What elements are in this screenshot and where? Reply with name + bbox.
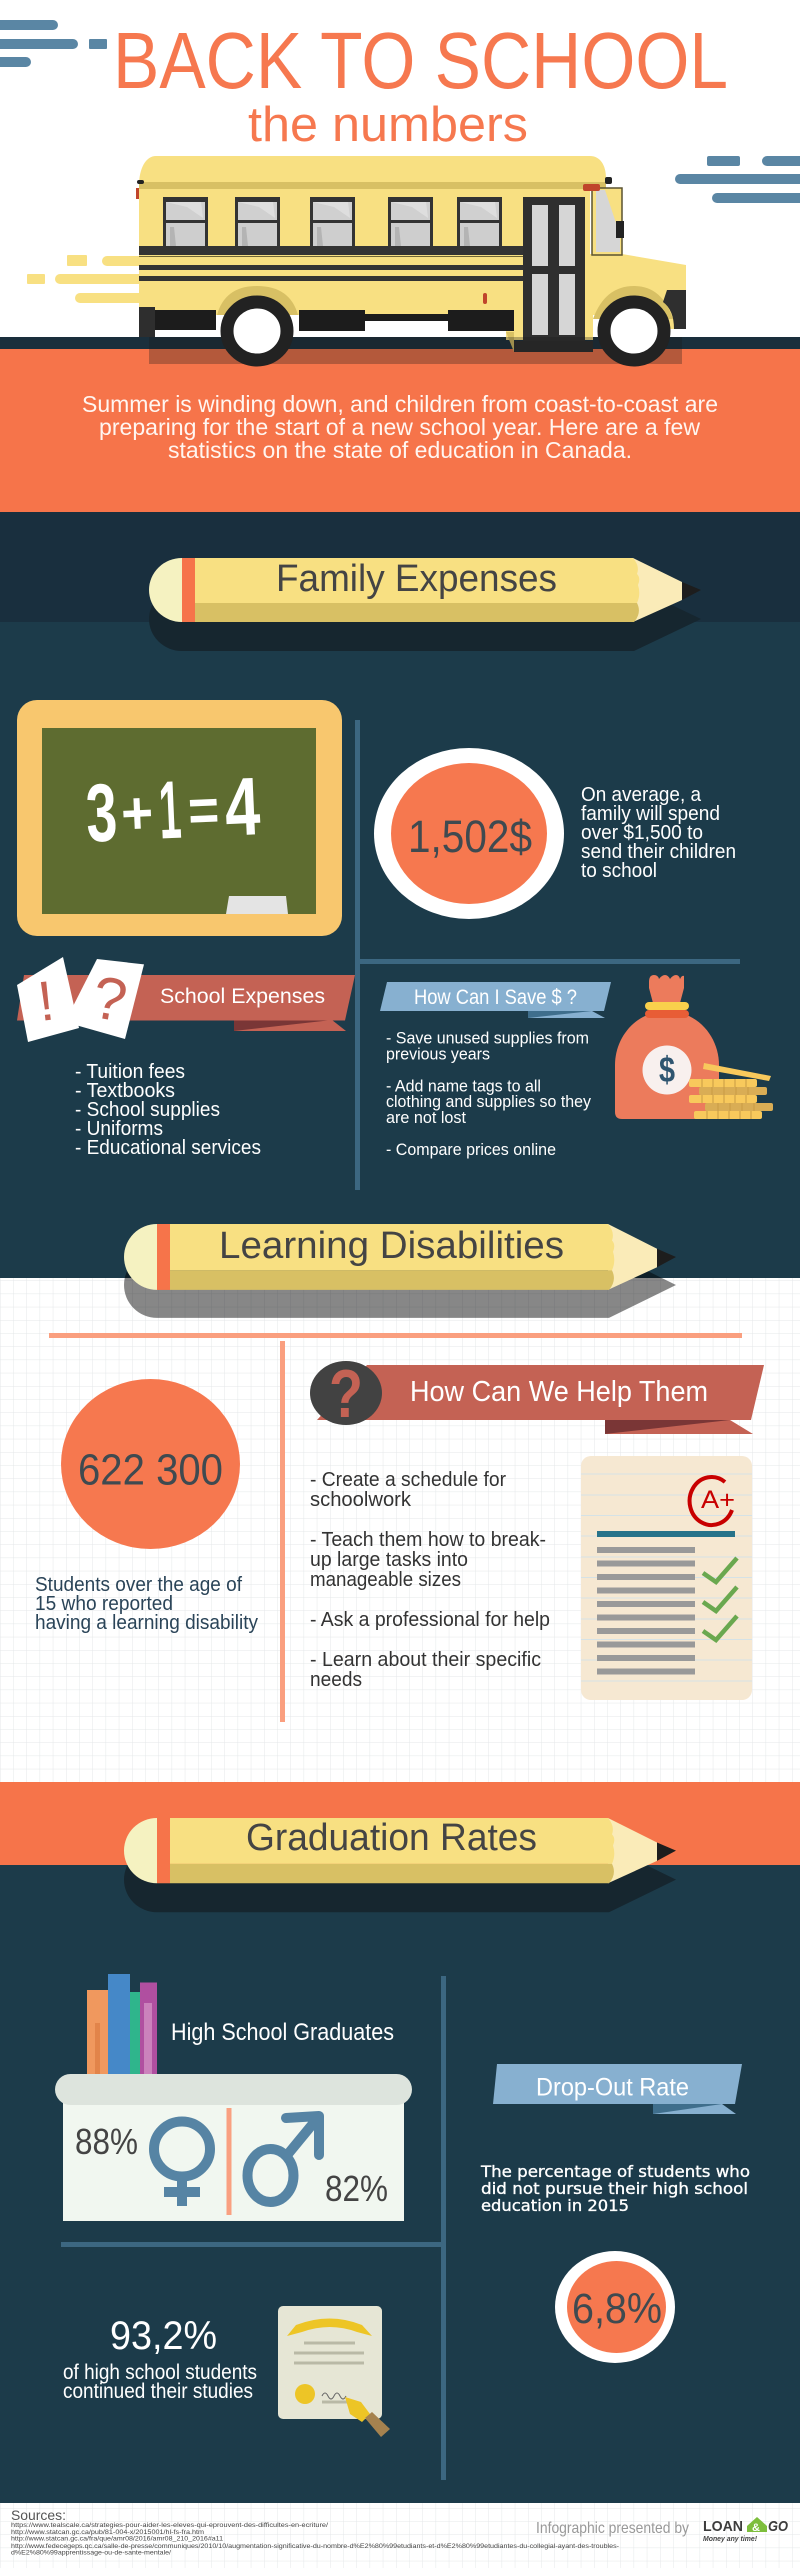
intro text: Summer is winding down, and children from coast-to-coast are xyxy=(82,391,718,417)
icon: exclamation and question cards: ? xyxy=(87,963,132,1035)
sources list xyxy=(11,2523,619,2556)
text: average family spend: send their children xyxy=(581,841,736,863)
sources list: d%E2%80%99apprentissage-ou-de-sante-mentale/ xyxy=(11,2550,171,2556)
text: average family spend: over $1,500 to xyxy=(581,822,703,844)
heading: graduation rates pencil xyxy=(124,1817,676,1883)
text: drop-out description: education in 2015 xyxy=(481,2196,629,2215)
stat circle: 622 300 xyxy=(61,1379,240,1549)
list: how to help: - Ask a professional for help xyxy=(310,1609,550,1631)
ribbon: drop-out rate: Drop-Out Rate xyxy=(536,2074,689,2102)
list: saving tips: - Add name tags to all xyxy=(386,1076,541,1096)
sources list: http://www.statcan.gc.ca/fra/que/amr08/2016/amr08_210_2016#a11 xyxy=(11,2536,224,2542)
icon: money bag and coins: $ xyxy=(659,1049,675,1090)
label: high school graduates: High School Graduates xyxy=(171,2019,394,2046)
text: drop-out description xyxy=(480,2162,750,2215)
text: average family spend: On average, a xyxy=(581,784,702,806)
sources list: http://www.statcan.gc.ca/pub/81-004-x/2015001/hl-fs-fra.htm xyxy=(11,2530,204,2536)
icon: diploma xyxy=(278,2306,390,2437)
text: drop-out description: The percentage of students who xyxy=(480,2162,750,2181)
sources heading: Sources: xyxy=(11,2508,66,2523)
intro text: statistics on the state of education in Canada. xyxy=(168,437,632,463)
chalk equation: 4 xyxy=(223,761,262,854)
text: students with disability: Students over the age of xyxy=(35,1574,242,1596)
list: saving tips: - Compare prices online xyxy=(386,1140,556,1159)
list: school expenses: - School supplies xyxy=(75,1099,220,1121)
text: average family spend: family will spend xyxy=(581,803,720,825)
icon: books xyxy=(87,1974,157,2074)
bus stripes xyxy=(139,246,524,281)
ribbon: school expenses: School Expenses xyxy=(160,984,325,1008)
stat circle: 6,8% xyxy=(555,2251,675,2363)
presented by: Infographic presented by xyxy=(536,2520,689,2537)
text: drop-out description: did not pursue their high school xyxy=(481,2179,748,2198)
orange band xyxy=(0,1782,800,1865)
icon: graded test paper: A+ xyxy=(701,1486,735,1514)
icon: exclamation and question cards: ! xyxy=(34,968,57,1033)
list: saving tips: previous years xyxy=(386,1044,490,1064)
ribbon: how can we help them xyxy=(310,1356,764,1434)
text: continued studies: continued their studies xyxy=(63,2380,253,2403)
logo: loan and go: GO xyxy=(768,2518,788,2535)
bus yellow speed lines xyxy=(27,255,147,303)
list: saving tips: are not lost xyxy=(386,1108,466,1127)
bus wheels xyxy=(227,302,664,360)
stat: 93,2%: 93,2% xyxy=(110,2314,217,2358)
list: how to help: - Learn about their specific xyxy=(310,1649,541,1671)
header: speed lines right xyxy=(675,156,800,203)
intro text xyxy=(82,391,718,463)
panel: graduation rates background xyxy=(0,1865,800,2503)
icon: exclamation and question cards xyxy=(17,957,144,1042)
bus roof band xyxy=(139,182,606,189)
chalk equation: + xyxy=(120,779,155,847)
list: saving tips xyxy=(386,1028,591,1159)
bus wheel arches xyxy=(217,286,673,319)
dividers: learning disabilities xyxy=(49,1333,742,1722)
list: saving tips: - Save unused supplies from xyxy=(386,1028,589,1048)
dividers: graduation xyxy=(61,1976,446,2480)
ribbon: how can we help them: How Can We Help Them xyxy=(410,1376,708,1408)
bus door xyxy=(506,197,593,352)
heading: graduation rates pencil: Graduation Rates xyxy=(246,1817,537,1859)
chalk equation: 3 xyxy=(84,767,119,860)
sources list: http://www.fedecegeps.qc.ca/salle-de-presse/communiques/2010/10/augmentation-significative-du-nombre-d%E2%80%99etudiants-et-d%E2%80%99etudiantes-du-collegial-ayant-des-troubles- xyxy=(11,2544,619,2550)
panel: learning disabilities background xyxy=(0,1278,800,1782)
stat circle: 622 300: 622 300 xyxy=(78,1446,223,1494)
stat circle: 6,8%: 6,8% xyxy=(572,2285,662,2333)
stat: male 82% xyxy=(248,2116,388,2209)
header: speed lines left xyxy=(0,20,107,67)
stat: female 88% xyxy=(75,2121,210,2206)
text: students with disability: 15 who reported xyxy=(35,1593,173,1615)
bus body xyxy=(139,156,686,340)
panel: family expenses background xyxy=(0,512,800,1278)
bus shadow xyxy=(149,337,682,364)
text: students with disability: having a learning disability xyxy=(35,1612,258,1634)
text: continued studies: of high school students xyxy=(63,2361,257,2384)
list: school expenses: - Textbooks xyxy=(75,1080,175,1102)
bus windows xyxy=(163,197,502,246)
school bus illustration xyxy=(136,156,686,364)
footer background xyxy=(0,2503,800,2568)
text: average family spend xyxy=(581,784,736,882)
chalk equation: = xyxy=(187,776,220,844)
bus windshield xyxy=(592,188,624,255)
dividers: family expenses xyxy=(355,720,740,1190)
graduation pencil shadow xyxy=(124,1847,676,1912)
text: average family spend: to school xyxy=(581,860,657,882)
list: how to help xyxy=(310,1469,550,1691)
text: students with disability xyxy=(35,1574,258,1634)
list: school expenses xyxy=(75,1061,261,1159)
heading: family expenses pencil: Family Expenses xyxy=(276,558,557,600)
list: how to help: needs xyxy=(310,1669,362,1691)
stat: female 88%: 88% xyxy=(75,2121,138,2162)
text: continued studies xyxy=(63,2361,257,2403)
icon: money bag and coins xyxy=(615,975,773,1119)
chalkboard xyxy=(17,700,342,936)
list: how to help: - Teach them how to break- xyxy=(310,1529,546,1551)
heading: family expenses pencil xyxy=(149,558,701,651)
logo: loan and go: & xyxy=(752,2522,760,2534)
ribbon: drop-out rate xyxy=(493,2064,742,2114)
logo: loan and go xyxy=(703,2517,788,2543)
list: how to help: up large tasks into xyxy=(310,1549,468,1571)
chalk equation xyxy=(84,761,262,860)
chalk equation: 1 xyxy=(157,765,183,856)
ribbon: how can we help them: ? xyxy=(329,1356,363,1432)
list: how to help: schoolwork xyxy=(310,1489,412,1511)
sources list: https://www.tealscale.ca/strategies-pour-aider-les-eleves-qui-eprouvent-des-difficultes-en-ecriture/ xyxy=(11,2523,328,2529)
icon: graded test paper xyxy=(581,1456,752,1700)
bus lights xyxy=(136,177,612,304)
ribbon: how can I save: How Can I Save $ ? xyxy=(414,985,577,1009)
heading: learning disabilities pencil: Learning Disabilities xyxy=(219,1225,564,1267)
logo: loan and go: Money any time! xyxy=(703,2534,757,2543)
list: how to help: - Create a schedule for xyxy=(310,1469,506,1491)
intro band: dark ground and orange panel xyxy=(0,337,800,512)
list: school expenses: - Tuition fees xyxy=(75,1061,185,1083)
logo: loan and go: LOAN xyxy=(703,2518,743,2535)
stat circle: 1,502$: 1,502$ xyxy=(408,811,532,862)
bus front bumper xyxy=(663,290,686,329)
list: school expenses: - Uniforms xyxy=(75,1118,163,1140)
list: how to help: manageable sizes xyxy=(310,1569,461,1591)
heading: learning disabilities pencil xyxy=(124,1224,676,1318)
intro text: preparing for the start of a new school year. Here are a few xyxy=(99,414,700,440)
ribbon: how can I save xyxy=(380,982,611,1018)
ribbon: school expenses xyxy=(17,975,355,1031)
stat circle: 1,502$ xyxy=(374,748,564,919)
box: graduate percentages xyxy=(55,2074,412,2221)
bus skirts and bumper xyxy=(139,307,514,337)
list: saving tips: clothing and supplies so they xyxy=(386,1092,591,1111)
list: school expenses: - Educational services xyxy=(75,1137,261,1159)
subtitle: the numbers xyxy=(248,98,528,152)
stat: male 82%: 82% xyxy=(325,2168,388,2209)
